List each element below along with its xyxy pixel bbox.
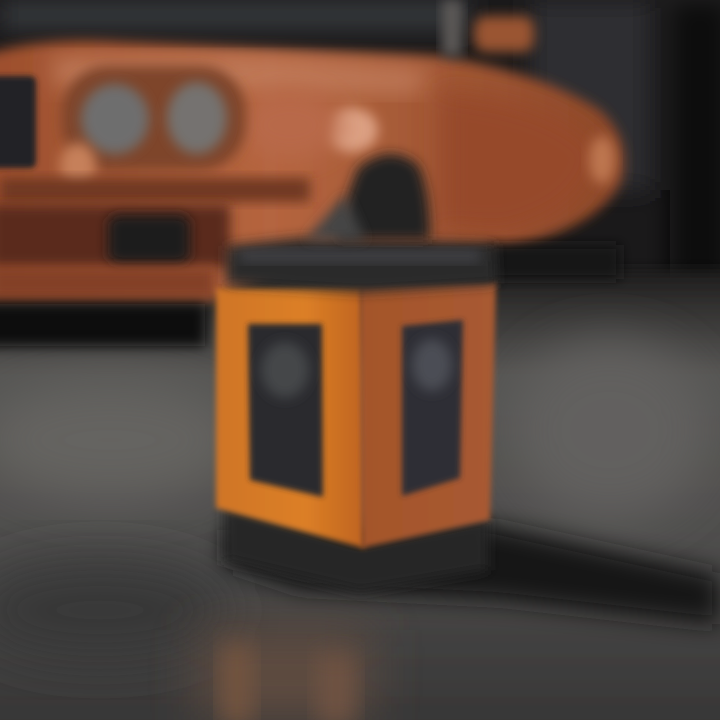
car: bumper <box>0 268 215 298</box>
car shadow <box>0 304 205 346</box>
headlight right <box>167 82 227 154</box>
cone side grey <box>305 195 365 240</box>
box lid <box>226 238 497 292</box>
car <box>0 0 624 346</box>
background wall <box>0 0 720 300</box>
wall: lighter grey panel top <box>0 0 720 330</box>
box base <box>224 505 488 592</box>
car: front lower band <box>0 178 310 202</box>
box right label detail <box>412 339 452 391</box>
headlight left <box>81 84 149 154</box>
floor <box>0 270 720 720</box>
box <box>216 154 720 625</box>
car: windscreen pillar <box>442 0 462 56</box>
box right label <box>402 320 463 496</box>
box ground shadow <box>225 525 720 625</box>
car: lower dark panel <box>0 205 230 267</box>
box lid highlight <box>240 250 480 262</box>
box left label detail <box>261 342 309 398</box>
car body <box>0 41 624 300</box>
car: lamp glow <box>60 143 96 187</box>
box top cone <box>335 154 430 240</box>
box right face <box>360 282 496 548</box>
car: bright reflection <box>326 108 378 152</box>
car: left dark grille <box>0 76 36 168</box>
box left face <box>216 286 364 548</box>
car: mirror <box>474 16 534 52</box>
car: lower dark intake <box>108 215 190 263</box>
car: bonnet highlight <box>50 58 430 92</box>
headlight surround <box>62 66 246 170</box>
car shadow right <box>490 245 620 279</box>
car: door shade <box>440 90 600 235</box>
box left label <box>248 324 323 497</box>
